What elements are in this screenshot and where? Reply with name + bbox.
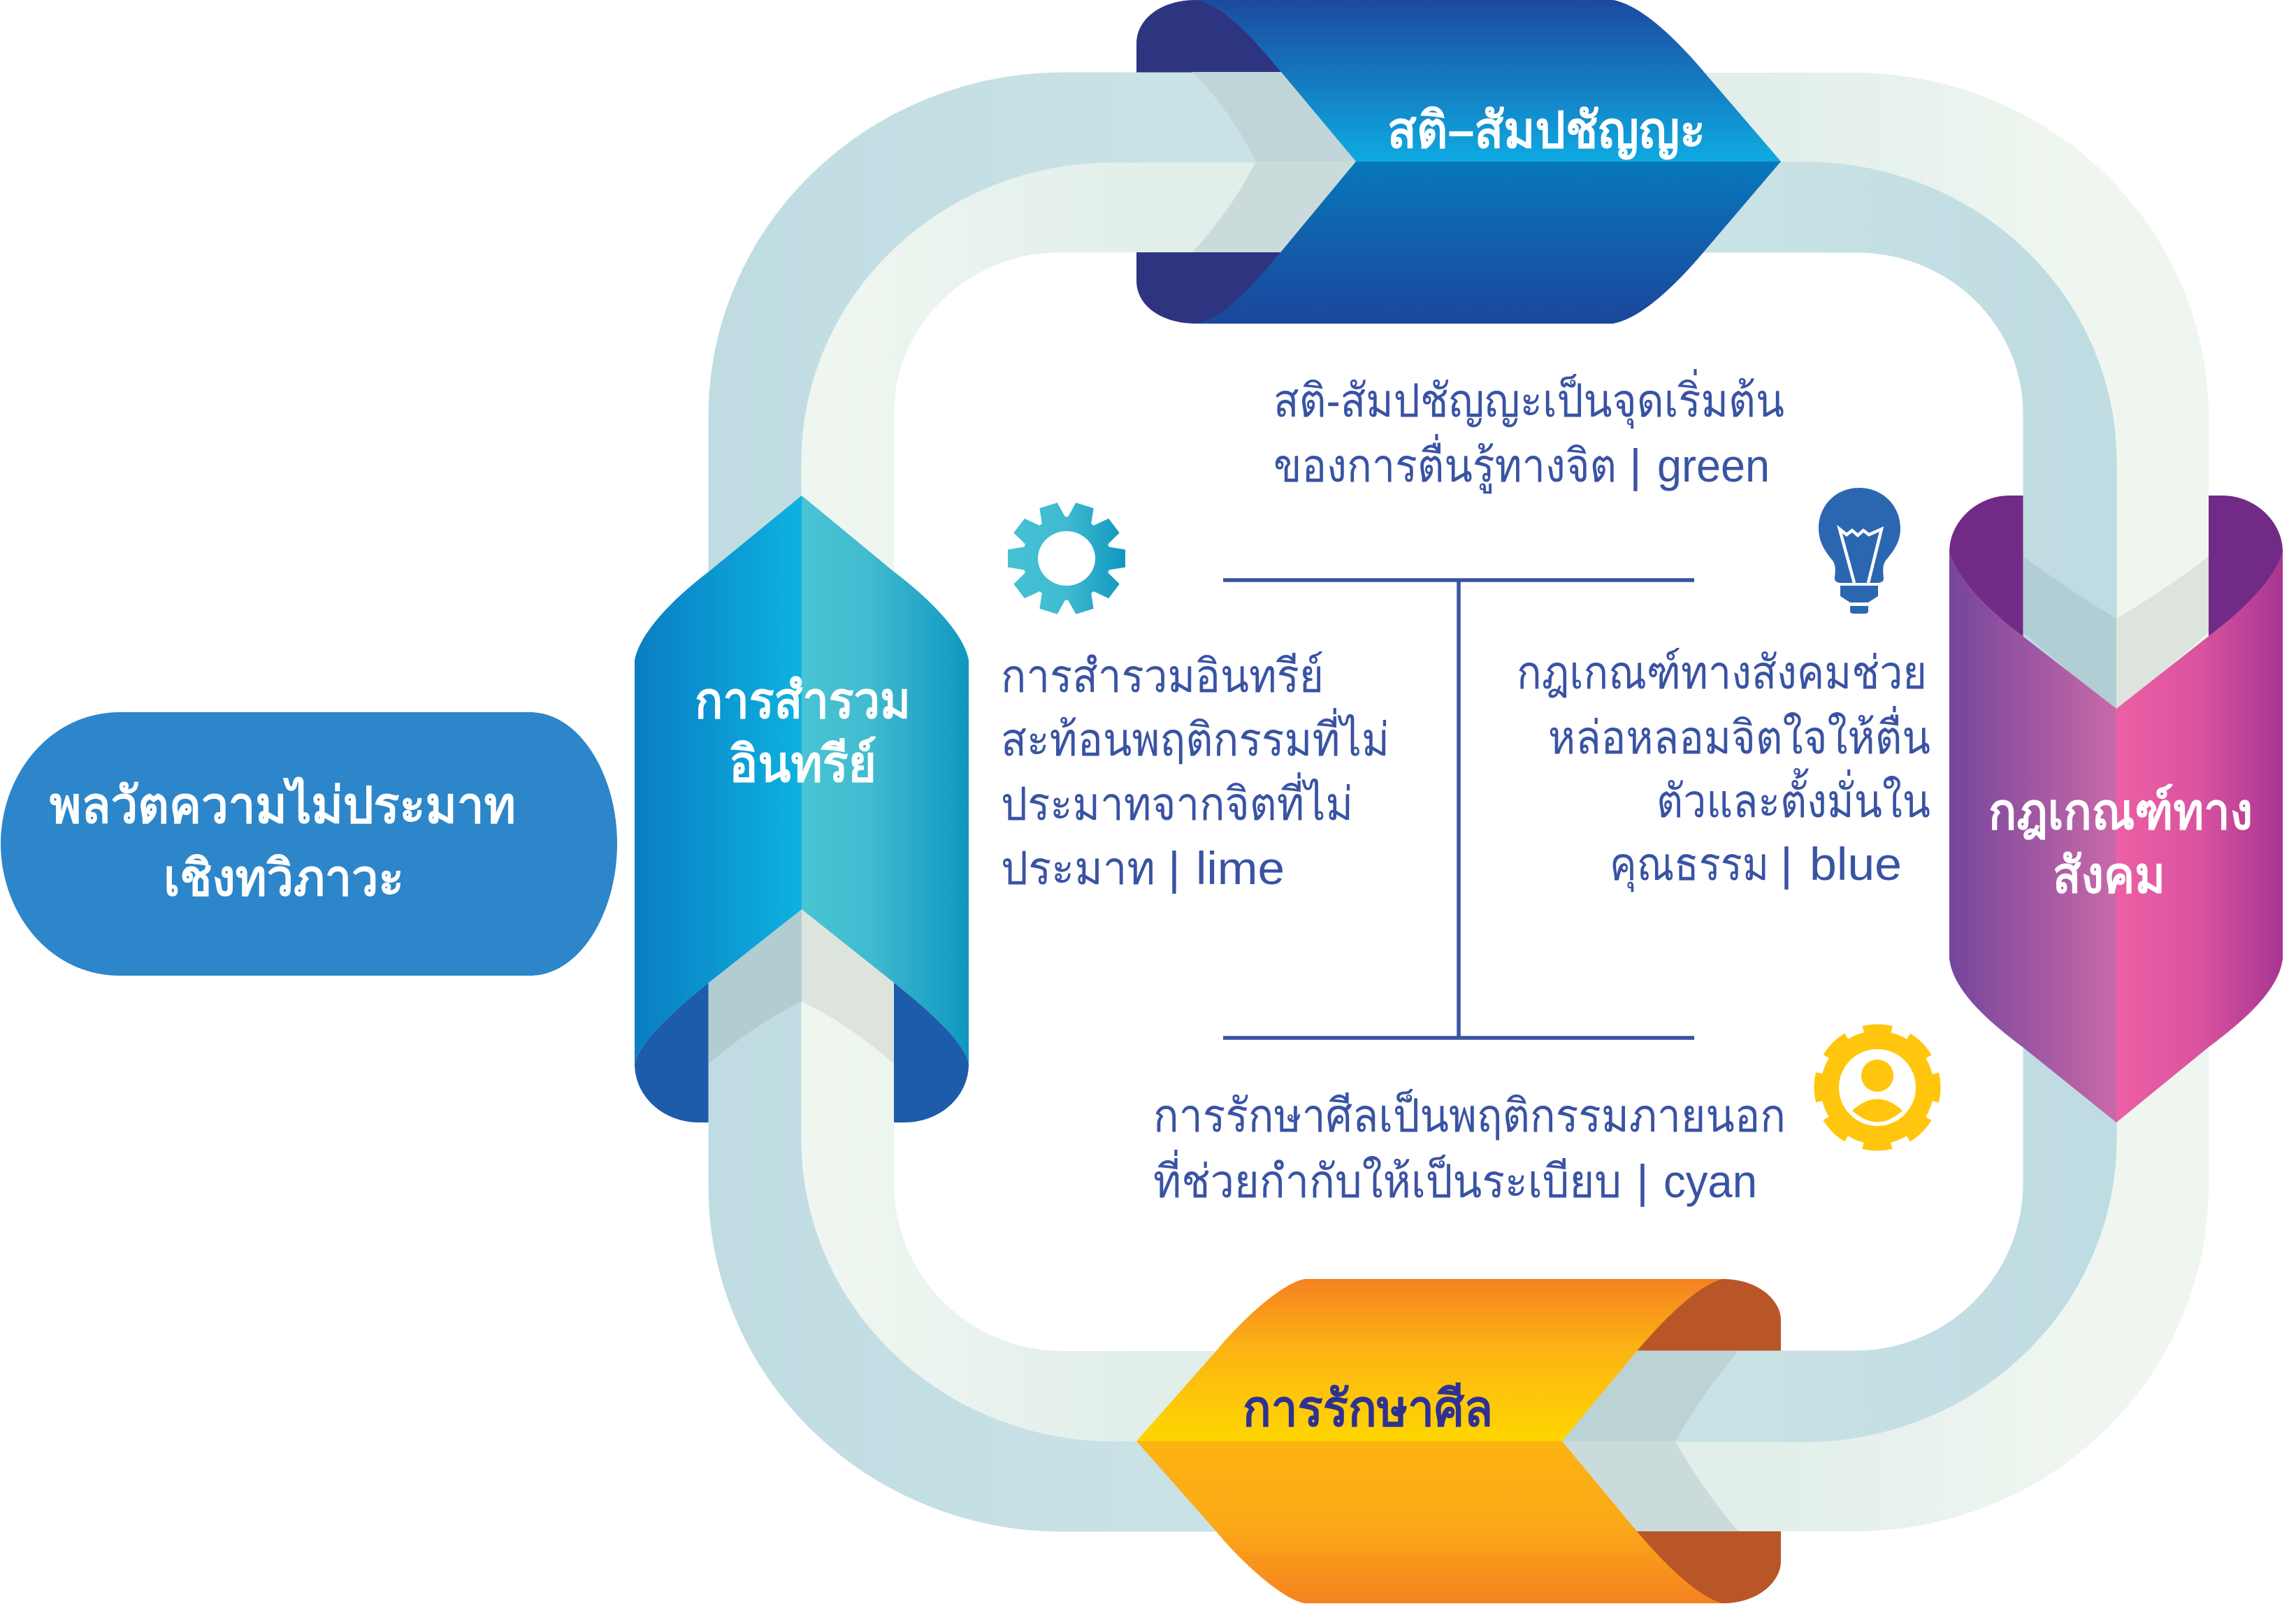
panel: right block: สังคม [2053, 848, 2165, 904]
panel: left block: อินทรีย์ [729, 736, 876, 793]
back panel: right block dark fold [1949, 496, 2283, 637]
panel: right block [1949, 552, 2283, 1122]
text: top description: สติ-สัมปชัญญะเป็นจุดเริ่มต้น [1273, 369, 1784, 429]
text: right description: ตัวและตั้งมั่นใน [1656, 768, 1930, 827]
text: left description: สะท้อนพฤติกรรมที่ไม่ [1001, 708, 1389, 765]
shadow: left block on ring [709, 906, 894, 1064]
panel: top block: สติ–สัมปชัญญะ [1387, 103, 1705, 160]
text: right description: กฎเกณฑ์ทางสังคมช่วย [1517, 646, 1927, 698]
text: bottom description: | [1636, 1155, 1649, 1207]
text: bottom description: การรักษาศีลเป็นพฤติกรรมภายนอก [1153, 1088, 1786, 1141]
text: right description [1517, 646, 1930, 893]
panel: top block [1196, 0, 1781, 324]
back panel: left block dark fold [635, 983, 969, 1122]
text: bottom description: ที่ช่วยกำกับให้เป็นระเบียบ [1153, 1150, 1622, 1207]
ring: left half inner band [801, 162, 1363, 1442]
panel: left block [635, 496, 969, 1064]
text: left description [1001, 650, 1389, 894]
shadow: right block on ring [2023, 556, 2209, 713]
panel: blue pill heading [1, 712, 617, 976]
text: right description: blue [1810, 838, 1902, 890]
I-beam divider [1223, 580, 1694, 1038]
shadow: bottom block on ring [1559, 1351, 1738, 1531]
panel: bottom block: การรักษาศีล [1243, 1381, 1493, 1437]
text: top description: ของการตื่นรู้ทางจิต [1273, 434, 1617, 494]
panel: blue pill heading: พลวัตความไม่ประมาท [50, 776, 516, 834]
text: right description: หล่อหลอมจิตใจให้ตื่น [1548, 706, 1930, 763]
text: bottom description [1153, 1088, 1786, 1207]
text: right description: | [1780, 838, 1793, 890]
ring: right half outer band [1573, 73, 2209, 1531]
ring: left half outer band [709, 73, 1363, 1531]
text: left description: การสำรวมอินทรีย์ [1001, 650, 1324, 702]
text: left description: ประมาท [1001, 842, 1155, 894]
panel: bottom block [1136, 1279, 1723, 1603]
text: top description: | [1629, 440, 1642, 491]
text: bottom description: cyan [1663, 1155, 1757, 1207]
ring: right half inner band [1573, 162, 2116, 1442]
back panel: top block dark fold [1136, 0, 1328, 324]
icon: light bulb [1819, 488, 1900, 614]
text: left description: lime [1196, 842, 1285, 894]
panel: right block: กฎเกณฑ์ทาง [1988, 783, 2253, 840]
text: right description: คุณธรรม [1610, 838, 1769, 893]
text: left description: | [1168, 842, 1181, 894]
icon: yellow gear with person [1819, 1029, 1935, 1146]
text: top description: green [1657, 440, 1770, 491]
shadow: top block on ring [1192, 72, 1359, 252]
panel: left block: การสำรวม [695, 673, 911, 729]
text: left description: ประมาทจากจิตที่ไม่ [1001, 772, 1353, 830]
panel: blue pill heading: เชิงทวิภาวะ [164, 851, 404, 906]
text: top description [1273, 369, 1784, 494]
icon: teal gear [1008, 503, 1125, 614]
back panel: bottom block dark fold [1608, 1279, 1781, 1603]
